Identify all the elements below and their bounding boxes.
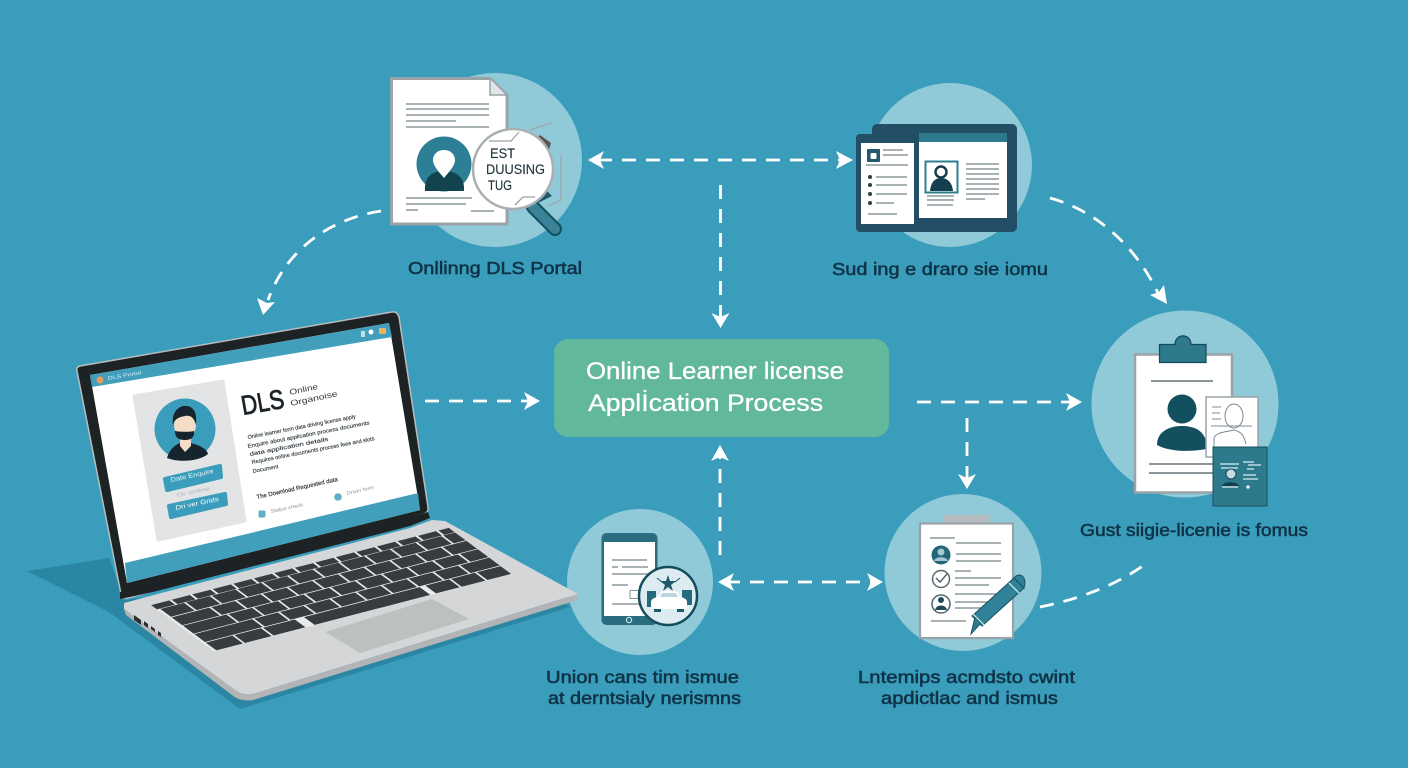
arrow: phone and form, two-way xyxy=(718,573,883,591)
arrow: laptop to title box xyxy=(425,392,540,410)
central title box: Online Learner license xyxy=(586,358,844,385)
portal paragraph: Requires online documents process fees and slots xyxy=(251,436,375,466)
label: fifth step xyxy=(546,667,741,708)
laptop shadow xyxy=(27,558,570,709)
magnifier text: EST xyxy=(490,146,515,161)
icon: tablet and browser window xyxy=(856,83,1032,247)
label: fifth step: at derntsialy nerismns xyxy=(548,688,741,708)
connector: form to clipboard label xyxy=(1040,562,1148,607)
portal buttons: Date Enquire xyxy=(170,468,215,484)
portal screen content xyxy=(96,328,386,540)
laptop lid and bezel xyxy=(77,312,430,599)
magnifier text: DUUSING xyxy=(486,162,545,177)
arrow: phone up to title box xyxy=(711,445,729,555)
portal paragraph: Document xyxy=(252,464,279,475)
label: fourth step: apdictlac and ismus xyxy=(881,688,1058,708)
portal checkboxes xyxy=(258,485,375,518)
label: fourth step xyxy=(858,667,1075,708)
avatar xyxy=(154,398,216,461)
label: fifth step: Union cans tim ismue xyxy=(546,667,739,687)
label: portal: Onllinng DLS Portal xyxy=(408,258,582,278)
DLS heading: DLS xyxy=(239,384,286,421)
portal paragraph xyxy=(247,414,375,501)
arrow: title box to form xyxy=(958,418,976,489)
icon: phone with car badge xyxy=(567,509,713,655)
profile card xyxy=(134,381,245,540)
arrow: portal to tablet, two-way xyxy=(588,151,853,169)
portal paragraph: data application details xyxy=(249,437,329,458)
portal buttons: Dri ver Grids xyxy=(175,496,220,512)
central title box xyxy=(554,339,889,437)
label: second step: Sud ing e draro sie iomu xyxy=(832,259,1048,279)
portal paragraph: Online learner form data driving license apply xyxy=(247,414,357,441)
portal checkboxes: Status check xyxy=(270,502,304,515)
icon: document with magnifier xyxy=(392,73,582,247)
label: third step: Gust siigie-licenie is fomus xyxy=(1080,520,1308,540)
portal checkboxes: Driver form xyxy=(346,485,375,497)
keyboard xyxy=(151,528,511,651)
icon: clipboard with profile xyxy=(1092,310,1278,506)
label: fourth step: Lntemips acmdsto cwint xyxy=(858,667,1075,687)
portal buttons: Or online xyxy=(176,486,211,499)
arrow: document to laptop xyxy=(257,211,381,315)
trackpad xyxy=(325,599,469,653)
screen header icons: DLS Portal xyxy=(107,370,142,382)
icon: checklist form and pen xyxy=(884,494,1042,651)
central title box: Applİcation Process xyxy=(588,390,823,417)
DLS heading xyxy=(239,382,339,421)
portal paragraph: The Download Requested data xyxy=(256,477,339,501)
portal paragraph: Enquire about application process documents xyxy=(247,420,370,450)
DLS heading: Online xyxy=(289,382,319,397)
magnifier text: TUG xyxy=(488,178,512,193)
icon: laptop showing DLS portal xyxy=(27,312,578,709)
DLS heading: Organoise xyxy=(290,389,339,408)
laptop base xyxy=(124,520,578,700)
arrow: title box to clipboard xyxy=(917,393,1082,411)
magnifier text xyxy=(486,146,545,193)
arrow: tablet to clipboard xyxy=(1050,198,1167,304)
arrow: down to title box xyxy=(712,185,730,328)
screen header icons xyxy=(96,328,386,384)
portal buttons xyxy=(165,466,226,517)
